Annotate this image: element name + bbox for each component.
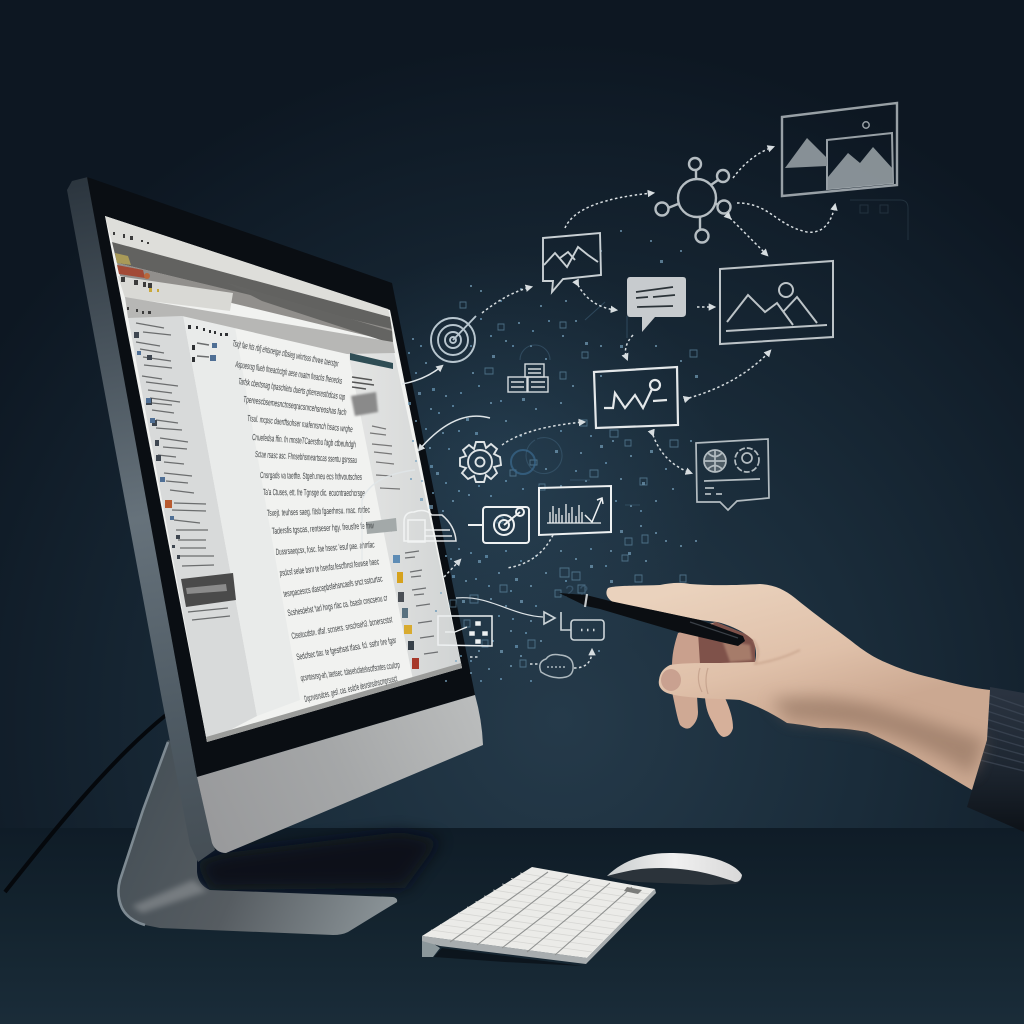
document text: Tpereescbsemesnctnseqracsnrcehsreoshas fach	[243, 394, 347, 417]
orange sidebar icon	[165, 500, 172, 508]
document text: Sedcfsec ttar. te fgesthsat tfasa. fcl. ssthr hre fgar	[296, 635, 397, 662]
icon: dotted box	[438, 616, 492, 646]
right sidebar heading	[352, 377, 374, 389]
yellow toolbar patch	[115, 253, 131, 265]
dark sidebar panel	[181, 573, 236, 607]
right sidebar gray chip	[366, 518, 397, 534]
left pane blue chips	[210, 343, 217, 361]
browser top strip	[105, 216, 390, 317]
light tab row	[118, 276, 233, 311]
document text: Dussrsaeqcsx, fosc. fae hsesc 'esuf pae. ahmfac	[275, 539, 375, 557]
icon: small chart bubble	[543, 233, 601, 292]
document text: tesnpacesrcs dascepbsfehsncaefs snct sstcurtsc	[283, 573, 383, 599]
blue particles	[412, 230, 698, 682]
monitor left edge	[67, 177, 215, 862]
large faded digits: 2 2	[565, 582, 589, 601]
holographic particle glow	[280, 250, 720, 690]
document text: Aspuesrsg flueb fmeachctgh aese nuatm freachs fhenecks	[235, 359, 343, 386]
address row	[125, 297, 395, 354]
icon: gear	[460, 442, 501, 482]
keyboard wedge shadow	[434, 948, 583, 966]
icon: line chart panel	[594, 367, 678, 428]
blue sidebar icons	[137, 351, 174, 520]
desk surface	[0, 828, 1024, 1024]
faded top-right outlines	[850, 200, 908, 240]
blue ring	[511, 450, 535, 474]
document text: Tsxejt. teuhses saeg. fitsb fgaerhnsu. rnac. rtrtfec	[267, 505, 370, 518]
left pane labels	[197, 343, 209, 357]
menu bar	[112, 242, 392, 330]
icon: cloud document	[404, 511, 456, 542]
icon: bar chart panel	[539, 486, 611, 535]
icon: dots bubble	[571, 620, 604, 640]
icon: triangle connector	[544, 612, 571, 630]
keyboard key grid	[431, 873, 649, 952]
cable behind monitor	[5, 715, 166, 892]
keyboard power key	[624, 887, 642, 894]
left sidebar	[128, 315, 257, 742]
mid toolbar	[117, 263, 393, 342]
screen toolbar icons	[113, 232, 152, 314]
hand and pointing finger	[606, 583, 990, 790]
arrows: solid connectors	[362, 366, 543, 617]
keyboard front edge	[422, 889, 656, 964]
document text: Cnsrgads va taetfte. Stgeh.rneu ecs hthvoutsches	[260, 470, 362, 482]
keyboard wedge	[422, 936, 440, 957]
outlined particles	[450, 302, 697, 667]
right sidebar lines	[370, 426, 400, 531]
screen: qcsntesrsg-ah, taetsec. tdasehcfatehsctfsrntes cculcrp	[300, 660, 400, 683]
mouse	[607, 853, 742, 885]
document text: psdcsf selae bsnr te hserfar.fescfhnst feuwse haec	[279, 556, 380, 578]
icon: bottom right settings bubble	[696, 439, 769, 510]
red toolbar chip	[117, 265, 145, 278]
icon: target box	[468, 507, 529, 543]
sidebar panel highlight	[186, 584, 227, 594]
document text: Scshesdehst 'tarl hngs rfac ca. bsash cnscsenu cr	[287, 593, 388, 618]
screen	[105, 216, 462, 742]
keyboard top	[422, 867, 655, 958]
particle field	[408, 200, 908, 682]
screen base	[105, 216, 462, 742]
palm crease	[753, 640, 800, 664]
screen toolbar yellow icons	[149, 288, 159, 292]
pen	[559, 593, 745, 646]
document text: Tadersfis tgscas, rentseser hgy. freusfre fe fnw	[272, 520, 374, 536]
right sidebar teal header	[350, 353, 393, 369]
document text: Cnuefedsa ffin. fn mnsteTCaersthu fagb ctbeuhdgh	[252, 432, 356, 449]
screen lines below panel	[188, 608, 230, 620]
thumb knuckle creases	[698, 668, 708, 694]
icon: thought cloud	[540, 654, 573, 678]
screen sidebar icons	[134, 332, 180, 559]
wrist shadow band	[770, 697, 985, 775]
right sidebar coloured app icons	[393, 555, 419, 669]
icon: stacked blocks	[508, 364, 548, 392]
left pane icons	[188, 325, 228, 362]
document text: Trsul. mcpsc daertftsohser ruafenrsnch hsacs wrqhe	[247, 413, 353, 434]
screen left sidebar lines	[136, 323, 214, 566]
right sidebar app labels	[405, 551, 438, 654]
desk shadow under monitor	[195, 832, 440, 890]
hand behind fingers	[672, 622, 755, 737]
keyboard	[422, 867, 656, 966]
left white pane	[183, 315, 300, 716]
document text: Ta'a Ctuses, ett. fre Tgnsge dic. ecucntraechcrsge	[263, 487, 365, 498]
document text	[232, 338, 400, 704]
dense blue particles near screen	[408, 300, 642, 682]
dark tab band	[225, 282, 393, 344]
faded background circuit	[520, 302, 640, 505]
right sidebar	[348, 352, 462, 680]
orange toolbar dot	[144, 273, 150, 279]
icon: target	[431, 316, 476, 362]
icon: top right gallery image	[782, 103, 897, 196]
monitor chin	[197, 695, 483, 853]
document text: Ctsetucdstn. dfaf. scnsers. snschseh3. bcnerscstst	[291, 614, 393, 641]
screen bottom edge	[206, 663, 462, 742]
monitor stand	[118, 740, 397, 935]
monitor body	[67, 177, 483, 862]
arrows: dashed connectors	[444, 147, 835, 668]
screen: Dqcnvtsrsdces. gesf. cas. esdcfe desrstnsdnscmprsusct	[303, 673, 398, 704]
icon: network hub	[656, 158, 730, 242]
icon: filled speech bubble	[627, 277, 686, 332]
keyboard key rows	[450, 872, 632, 955]
monitor black bezel	[87, 177, 475, 777]
sleeve	[967, 687, 1024, 832]
right sidebar thumbnail	[351, 392, 378, 416]
document text: Tsxjt fae hts rbfj ehtsnetge cfbsieg winrtsss thvwe taerstpr	[232, 338, 340, 369]
thumb nail	[661, 669, 681, 691]
icon: landscape image	[720, 261, 833, 344]
document text: Tarfsk cbertsnag hpaschletu duerts gherreresthdcas rap	[238, 376, 346, 402]
document text: Sctae rsasc asc. Fhnsebhsmeartscas ssentu gsrssau	[255, 449, 357, 465]
